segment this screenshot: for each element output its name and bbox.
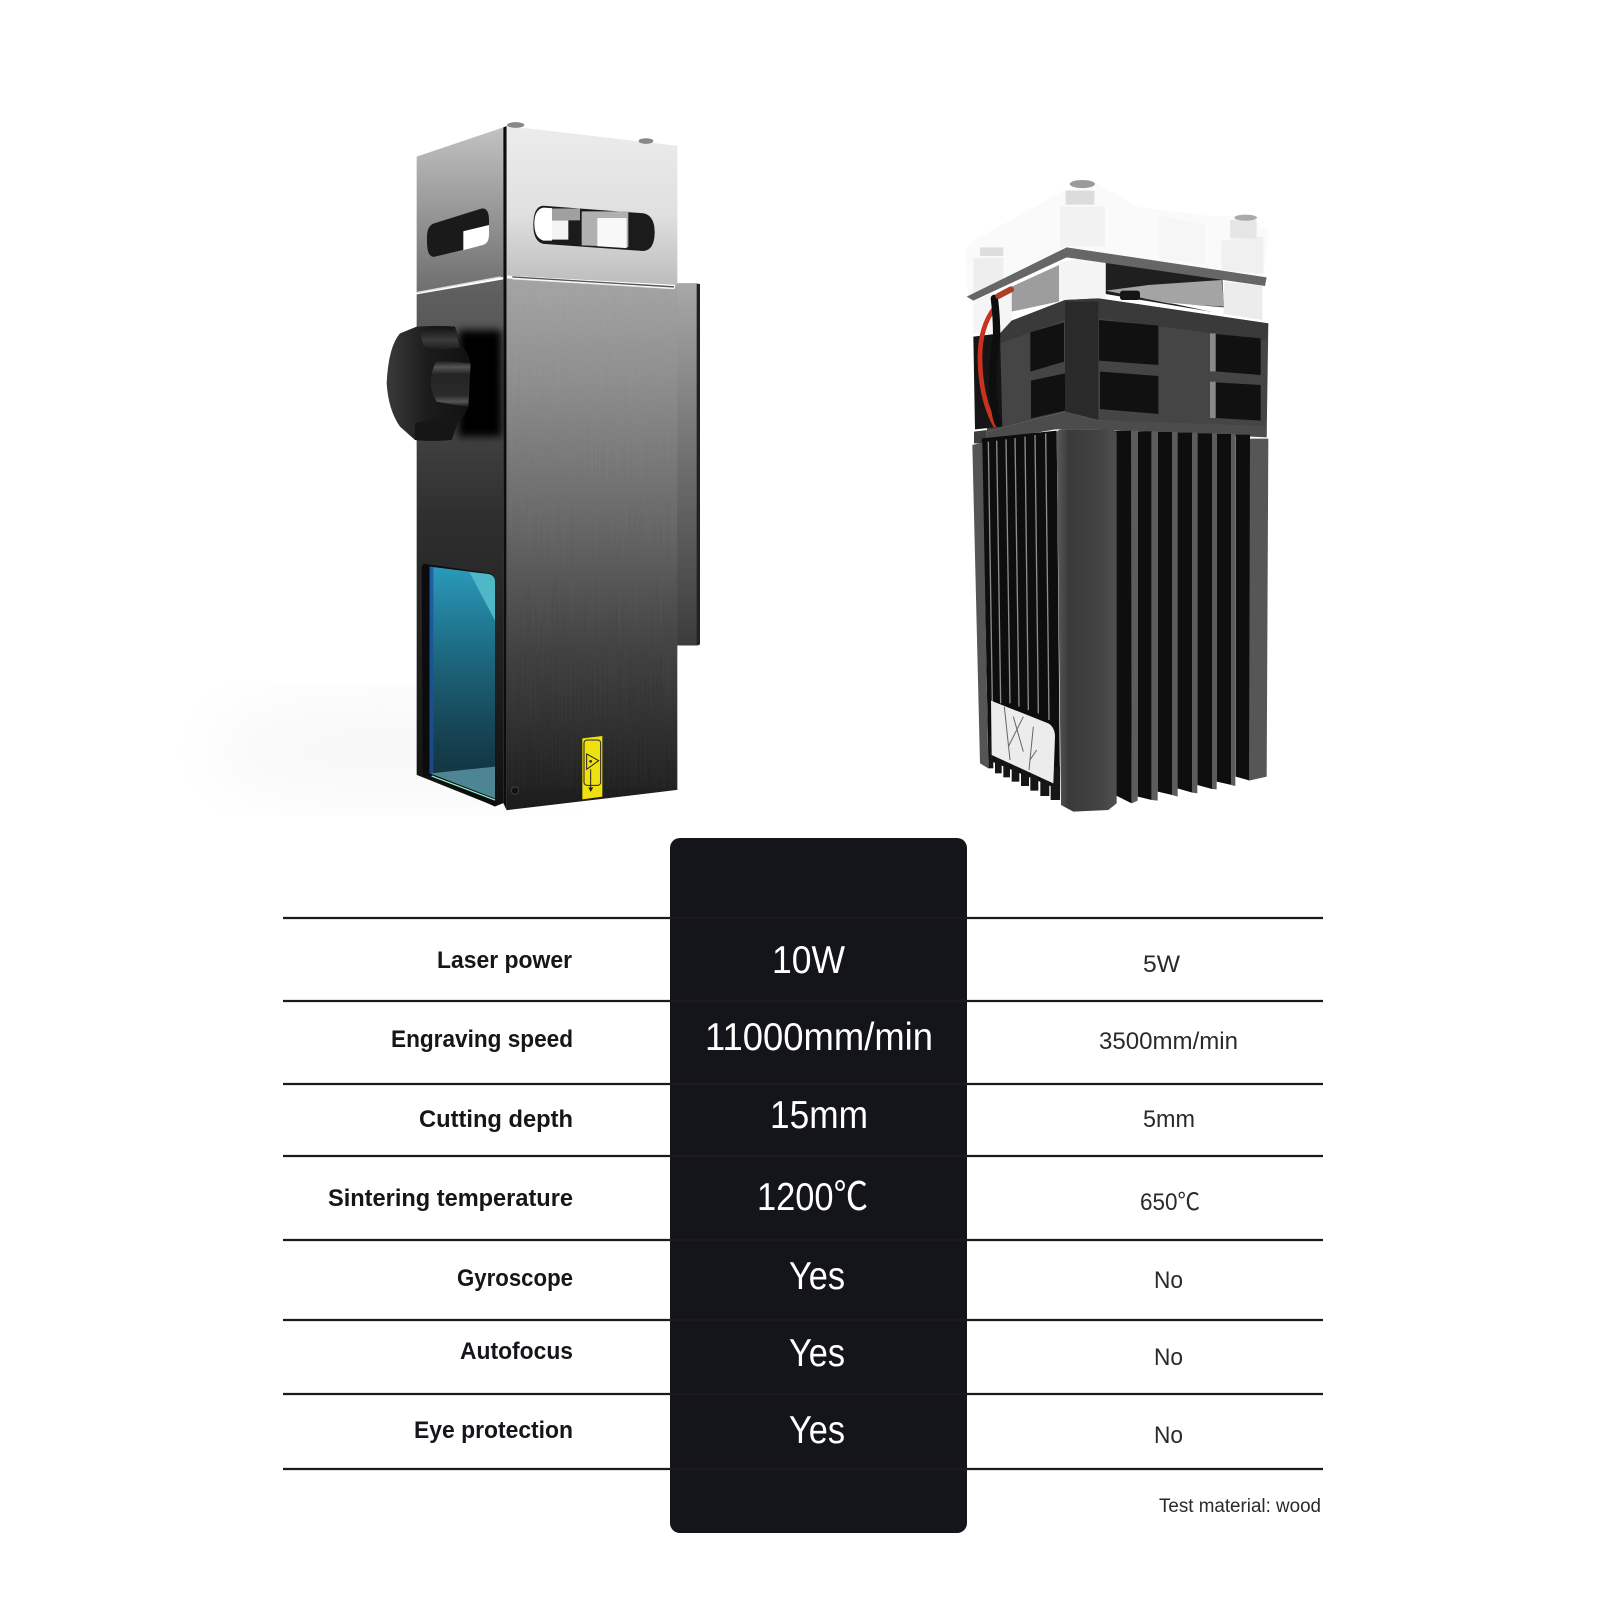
screw hole [511,787,519,794]
5W module values: 650℃ [1140,1189,1200,1216]
left fins [972,431,1060,800]
row labels: Gyroscope [457,1265,573,1292]
row labels: Cutting depth [419,1106,573,1133]
lens recess [422,564,495,807]
10W module values: Yes [789,1255,845,1298]
row labels: Eye protection [414,1417,573,1444]
10W module values [705,939,933,1452]
heatsink corner [1057,429,1117,812]
green light edge [432,776,495,800]
metal fan underside left [1012,265,1059,321]
yellow warning label [582,736,602,799]
glass left edge [429,567,433,773]
footnote: Test material: wood [1159,1496,1321,1517]
10W module values: Yes [789,1332,845,1375]
floor shadow [210,695,590,805]
panel: highlighted dark column [670,838,967,1533]
10W module values: Yes [789,1409,845,1452]
plastic block [973,298,1268,443]
5W module values: 3500mm/min [1099,1028,1238,1055]
white post left [973,290,1012,333]
right fins [1115,431,1268,803]
fin teeth [988,737,1060,800]
wires [980,289,1011,425]
5W module values: No [1154,1344,1183,1371]
corner edge [503,126,507,810]
5W module values [1099,951,1238,1449]
white post center [1059,259,1106,301]
glass floor [430,767,495,798]
white sticker [991,701,1055,783]
10W module values: 10W [772,939,845,982]
top plate [967,247,1267,301]
comparison table [283,918,1323,1469]
left face [417,127,503,806]
5W module values: 5W [1143,951,1180,978]
10W module values: 15mm [770,1094,868,1137]
front face top [507,126,677,285]
row labels: Autofocus [460,1338,573,1365]
laser module 10W: brushed metal housing [417,126,700,810]
row labels: Engraving speed [391,1026,573,1053]
row labels: Sintering temperature [328,1185,573,1212]
left edge block [972,443,988,768]
5W module values: No [1154,1267,1183,1294]
glass reflection [469,572,495,621]
white post right [1224,281,1262,320]
row lines [283,918,1323,1469]
row labels: Laser power [437,947,572,974]
left window slot [427,208,489,257]
laser module 5W: heatsink with fan [965,180,1268,812]
acrylic fan top [965,180,1268,298]
5W module values: 5mm [1143,1106,1195,1133]
glass [430,567,495,773]
10W module values: 1200℃ [757,1176,868,1219]
front face main [507,277,677,810]
lens glass and warning label [422,564,602,807]
front window slot [533,206,655,251]
fin highlights [988,433,1049,720]
5W module values: No [1154,1422,1183,1449]
row labels [328,947,573,1444]
10W module values: 11000mm/min [705,1016,933,1059]
top screws on metal housing [507,122,653,144]
vent windows [1030,320,1261,421]
back plate [675,283,700,646]
knob [387,326,502,441]
fan underside right [1106,261,1224,315]
